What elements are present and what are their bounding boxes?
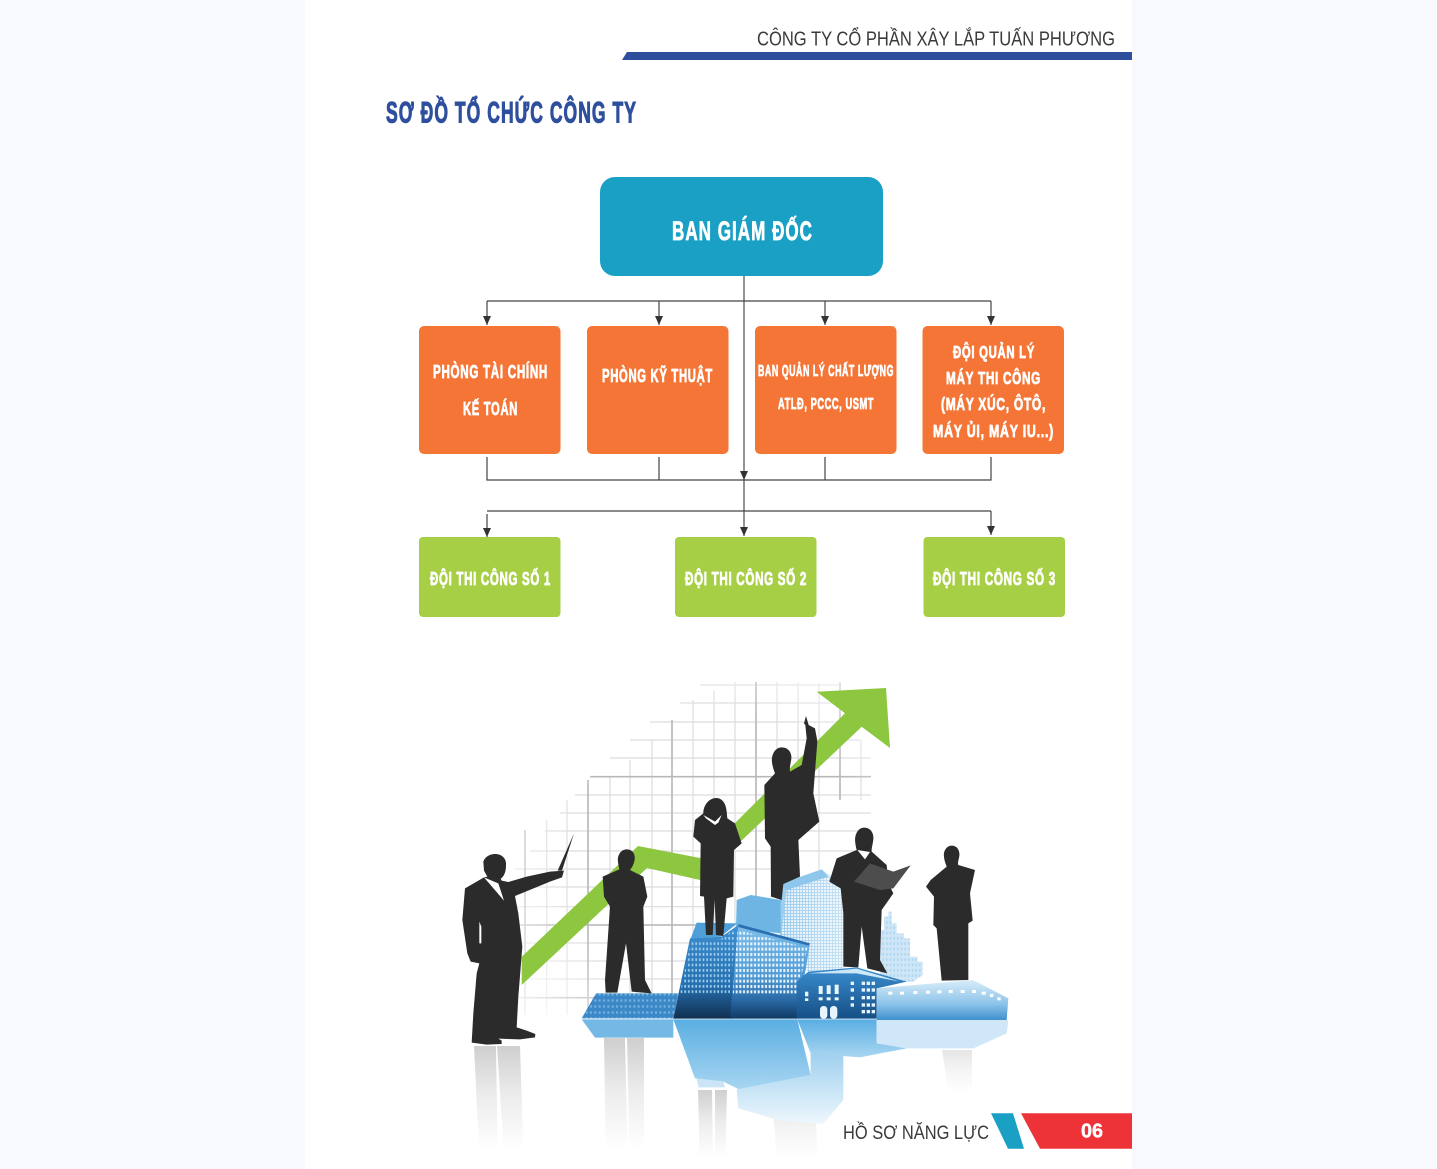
white sheet [305, 0, 1132, 1169]
footer page number: 06 [1081, 1120, 1103, 1142]
footer page number [1021, 1113, 1132, 1149]
box: Phòng Kỹ Thuật: PHÒNG KỸ THUẬT [602, 365, 713, 386]
header: company name and bar [622, 26, 1132, 60]
man with folder [829, 828, 893, 973]
main office building, right face [730, 924, 810, 1019]
main office building, left part [673, 925, 738, 1019]
buildings [582, 869, 1008, 1020]
box: Ban Quản Lý Chất Lượng: BAN QUẢN LÝ CHẤT LƯỢNG [758, 361, 894, 380]
short block [736, 895, 781, 933]
box: Phòng Tài Chính Kế Toán [419, 326, 560, 454]
box: Phòng Tài Chính Kế Toán: KẾ TOÁN [463, 398, 518, 419]
front building [797, 967, 907, 1019]
distant skyline [880, 912, 923, 982]
box: Đội Thi Công Số 3: ĐỘI THI CÔNG SỐ 3 [933, 568, 1056, 589]
illustration: business team over rising chart [462, 682, 1008, 1169]
man from behind [926, 846, 975, 981]
box: Ban Giám Đốc [600, 177, 883, 276]
man raising arm [764, 716, 819, 900]
box: Đội Quản Lý Máy Thi Công: MÁY THI CÔNG [946, 367, 1041, 388]
chart grid [515, 682, 871, 1015]
silhouette reflections [474, 1038, 972, 1169]
box: Đội Thi Công Số 2 [675, 537, 816, 617]
footer label: HỒ SƠ NĂNG LỰC [843, 1120, 989, 1144]
footer blue slash [991, 1113, 1024, 1149]
box: Đội Thi Công Số 1: ĐỘI THI CÔNG SỐ 1 [430, 568, 551, 589]
box: Ban Quản Lý Chất Lượng: ATLĐ, PCCC, USMT [778, 396, 874, 413]
main office roof [691, 923, 737, 939]
buildings reflection [582, 1019, 1008, 1124]
silhouettes: men on the left [462, 833, 652, 1045]
man pointing [462, 854, 564, 1045]
box: Phòng Tài Chính Kế Toán: PHÒNG TÀI CHÍNH [433, 361, 548, 382]
box: Đội Quản Lý Máy Thi Công: MÁY ỦI, MÁY IU...) [933, 420, 1054, 441]
box: Đội Thi Công Số 1 [419, 537, 560, 617]
box: Đội Quản Lý Máy Thi Công: ĐỘI QUẢN LÝ [953, 341, 1035, 362]
green rising arrow [522, 688, 890, 985]
header: company name and bar: CÔNG TY CỔ PHẦN XÂY LẮP TUẤN PHƯƠNG [757, 26, 1115, 50]
page canvas [386, 27, 1132, 1149]
box: Đội Thi Công Số 3 [924, 537, 1065, 617]
box: Đội Quản Lý Máy Thi Công: (MÁY XÚC, ÔTÔ, [941, 393, 1046, 414]
title: SƠ ĐỒ TỔ CHỨC CÔNG TY [386, 96, 637, 130]
man with crossed arms [603, 849, 652, 993]
silhouettes: people on the right [693, 716, 975, 981]
box: Ban Quản Lý Chất Lượng [755, 326, 896, 454]
box: Đội Thi Công Số 2: ĐỘI THI CÔNG SỐ 2 [685, 568, 807, 589]
box: Phòng Kỹ Thuật [587, 326, 728, 454]
box: Đội Quản Lý Máy Thi Công [922, 326, 1064, 454]
back tower [780, 869, 843, 973]
box: Ban Giám Đốc: BAN GIÁM ĐỐC [672, 214, 813, 246]
org chart connectors [487, 276, 991, 537]
woman [693, 798, 742, 936]
low left platform [582, 993, 678, 1018]
right low building [877, 980, 1008, 1020]
